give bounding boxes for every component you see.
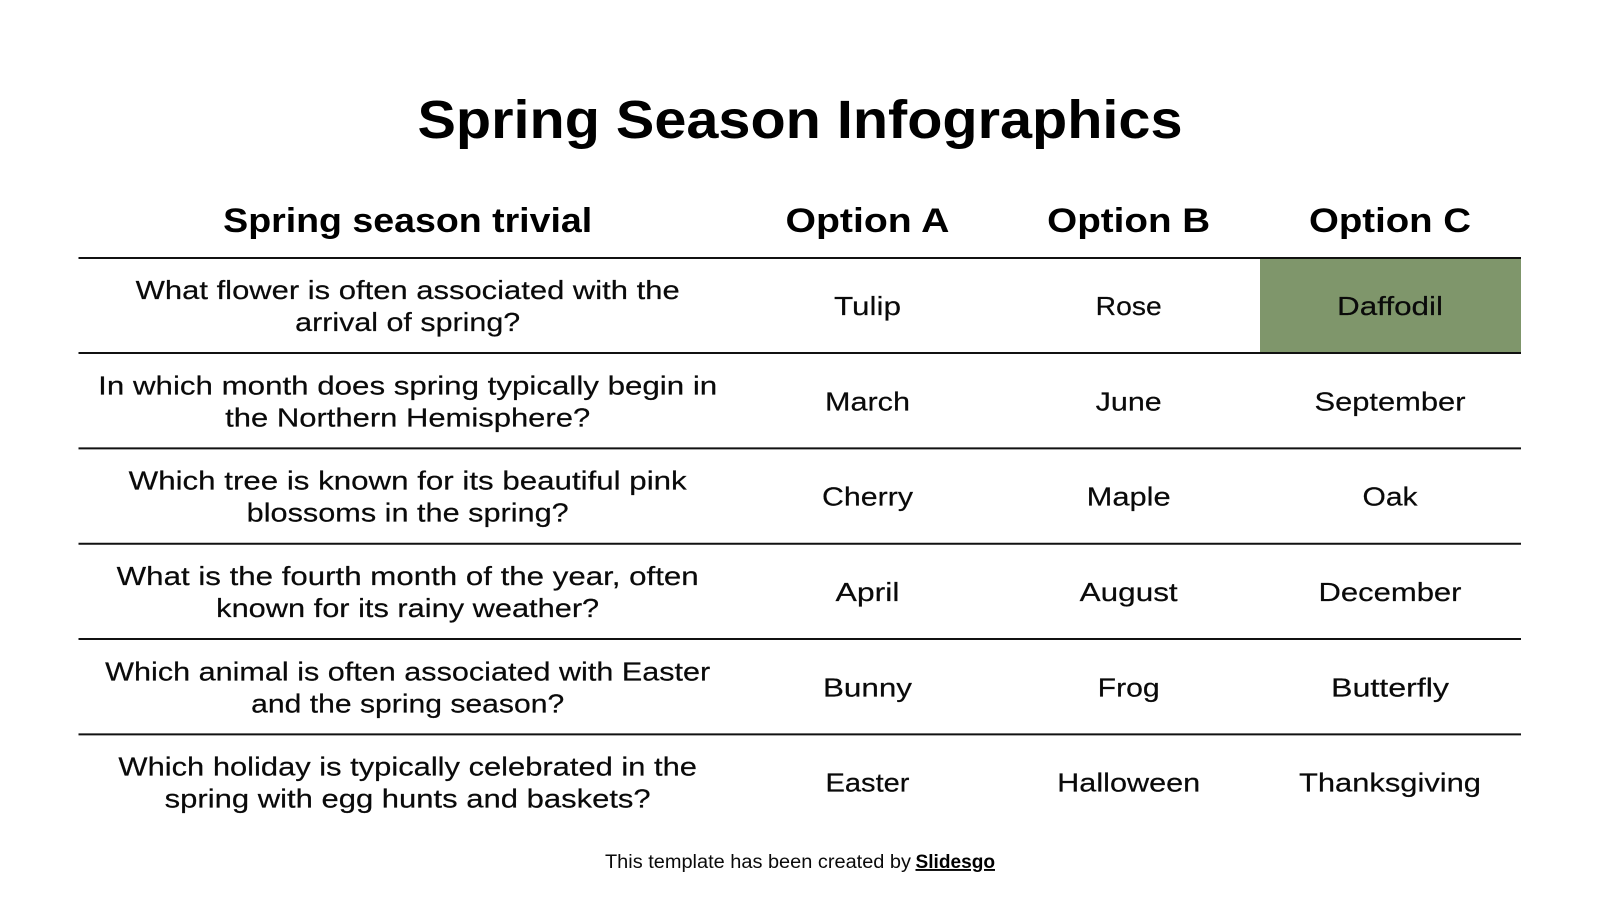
question 4: What is the fourth month of the year, often — [117, 561, 699, 591]
option A: Easter — [826, 768, 910, 798]
option B: Halloween — [1057, 768, 1200, 798]
question 2: In which month does spring typically begin in — [98, 370, 717, 400]
option C: Oak — [1362, 482, 1419, 512]
option C: December — [1318, 577, 1462, 607]
question 3 — [129, 466, 688, 528]
option B: August — [1080, 577, 1179, 607]
footer credit: Slidesgo — [916, 852, 995, 873]
row 6 — [118, 752, 1481, 814]
row 1 — [136, 275, 1443, 337]
footer credit: This template has been created by — [605, 852, 912, 873]
question 5: and the spring season? — [251, 688, 564, 718]
option C: Thanksgiving — [1299, 768, 1481, 798]
option A: April — [836, 577, 900, 607]
option C: Butterfly — [1331, 672, 1449, 702]
row 3 — [129, 466, 1419, 528]
option B: Frog — [1098, 672, 1160, 702]
row 5 — [105, 656, 1449, 718]
option A: Bunny — [823, 672, 912, 702]
table — [78, 202, 1521, 814]
heading: option C: Option C — [1309, 202, 1471, 240]
row 4 — [117, 561, 1462, 623]
question 5: Which animal is often associated with Easter — [105, 656, 711, 686]
question 4 — [117, 561, 699, 623]
option B: June — [1096, 386, 1162, 416]
question 1: arrival of spring? — [295, 307, 520, 337]
option A: Tulip — [834, 291, 901, 321]
heading: trivia column: Spring season trivial — [223, 202, 592, 240]
question 6 — [118, 752, 697, 814]
option C: September — [1314, 386, 1466, 416]
question 2: the Northern Hemisphere? — [225, 402, 590, 432]
question 2 — [98, 370, 717, 432]
heading: option B: Option B — [1047, 202, 1210, 240]
question 1 — [136, 275, 680, 337]
question 1: What flower is often associated with the — [136, 275, 680, 305]
question 6: Which holiday is typically celebrated in the — [118, 752, 697, 782]
heading: option A: Option A — [786, 202, 950, 240]
option A: March — [825, 386, 910, 416]
option A: Cherry — [822, 482, 913, 512]
option C: correct answer: Daffodil — [1337, 291, 1443, 321]
question 3: Which tree is known for its beautiful pink — [129, 466, 688, 496]
row 2 — [98, 370, 1466, 432]
table header row — [223, 202, 1471, 240]
highlighted answer cell — [1260, 258, 1521, 353]
question 5 — [105, 656, 711, 718]
option B: Maple — [1087, 482, 1171, 512]
question 3: blossoms in the spring? — [247, 498, 569, 528]
question 4: known for its rainy weather? — [216, 593, 599, 623]
question 6: spring with egg hunts and baskets? — [165, 784, 651, 814]
option B: Rose — [1096, 291, 1162, 321]
title: Spring Season Infographics — [418, 90, 1182, 150]
